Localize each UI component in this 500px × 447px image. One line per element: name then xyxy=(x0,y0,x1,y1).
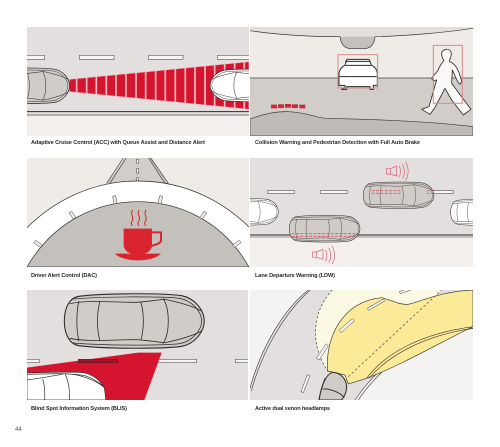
dash over zone xyxy=(78,359,118,363)
caption: headlamps: Active dual xenon headlamps xyxy=(255,406,330,412)
dial ticks xyxy=(34,196,241,247)
icon: coffee cup xyxy=(115,210,161,260)
car: headlamp vehicle xyxy=(319,372,347,400)
windscreen frame and mirror xyxy=(250,27,473,36)
radar beam xyxy=(69,62,249,109)
panel: adaptive cruise control xyxy=(27,27,249,136)
car: following vehicle xyxy=(27,68,70,104)
dashboard xyxy=(250,112,473,136)
caption: collision warning: Collision Warning and Pedestrian Detection with Full Auto Brake xyxy=(255,140,420,146)
car details xyxy=(27,374,103,400)
road ahead xyxy=(107,158,168,183)
low beam range xyxy=(316,290,442,382)
windscreen edge xyxy=(250,28,473,49)
caption: BLIS: Blind Spot Information System (BLIS) xyxy=(31,406,127,412)
car: own vehicle xyxy=(27,372,106,400)
icon: speaker upper xyxy=(386,162,408,180)
pedestrian detection box xyxy=(422,45,471,115)
car: passing vehicle xyxy=(64,294,204,348)
headlamp beam xyxy=(327,290,473,384)
icon: speaker lower xyxy=(313,246,334,264)
lane warning dashes xyxy=(292,191,434,236)
panel: driver alert control xyxy=(27,158,249,267)
car: drifting upper xyxy=(363,182,434,208)
panel: active dual xenon headlamps xyxy=(250,288,473,400)
blind spot zone xyxy=(27,353,162,400)
panel: lane departure warning xyxy=(250,158,473,267)
page number: 44 xyxy=(15,427,22,433)
caption: ACC: Adaptive Cruise Control (ACC) with Queue Assist and Distance Alert xyxy=(31,140,205,146)
panel: collision warning xyxy=(250,27,473,136)
caption: LDW: Lane Departure Warning (LDW) xyxy=(255,273,335,279)
car: vehicle ahead xyxy=(210,68,249,102)
warning lights xyxy=(271,104,305,108)
panel: blind spot information system xyxy=(23,290,251,400)
rear-view mirror xyxy=(340,37,375,49)
lane dashes xyxy=(23,55,252,59)
lane dashes xyxy=(301,288,411,393)
car detection box xyxy=(338,55,378,89)
caption: DAC: Driver Alert Control (DAC) xyxy=(31,273,97,279)
car: white right xyxy=(450,199,473,226)
instrument dial xyxy=(27,180,249,266)
lane dashes xyxy=(267,191,454,193)
road surface xyxy=(250,290,473,400)
car: white left xyxy=(250,198,279,226)
beam centre line xyxy=(348,290,442,377)
lane dashes xyxy=(23,359,251,363)
car: drifting lower xyxy=(289,215,360,242)
